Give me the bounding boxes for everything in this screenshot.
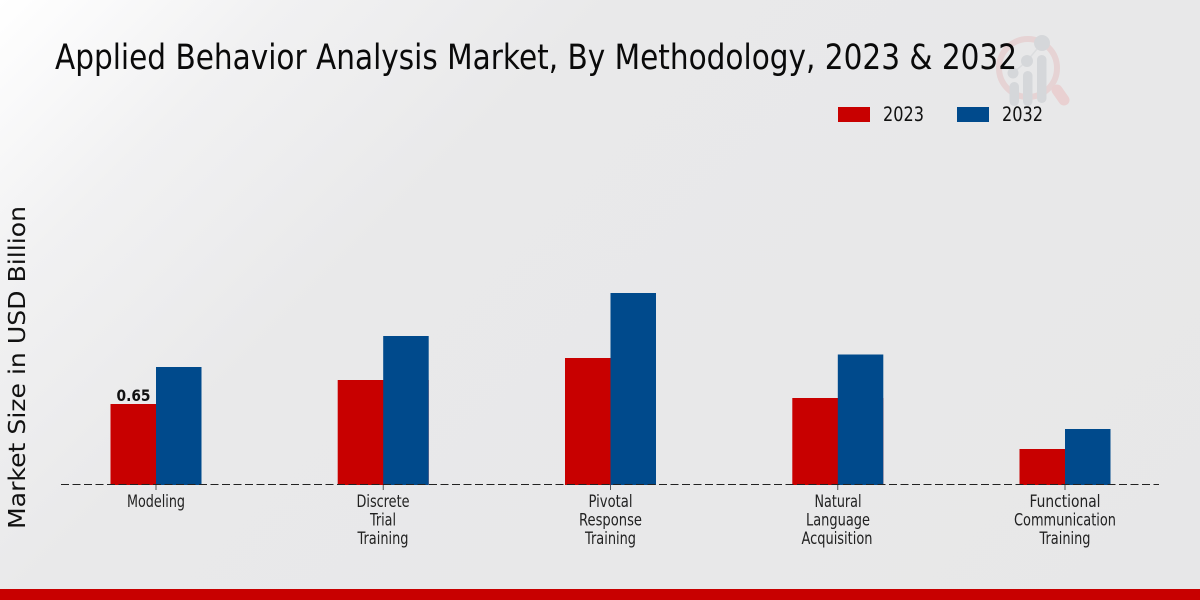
footer bar — [0, 589, 1200, 600]
label: Natural Language Acquisition — [802, 492, 872, 549]
group: Modeling — [110, 367, 202, 485]
title: Applied Behavior Analysis Market, By Methodology, 2023 & 2032 — [55, 38, 1017, 78]
icon: watermark logo — [999, 35, 1064, 106]
label: Functional Communication Training: Communication — [1014, 510, 1116, 530]
y axis label: Market Size in USD Billion — [5, 206, 31, 529]
label: Natural Language Acquisition: Language — [806, 510, 870, 530]
legend item: 2032: 2032 — [1002, 103, 1043, 126]
label: Modeling: Modeling — [127, 492, 185, 512]
legend item: 2023 — [838, 103, 924, 126]
x axis baseline — [61, 484, 1159, 486]
label: Natural Language Acquisition: Acquisition — [802, 529, 872, 549]
label: Pivotal Response Training: Response — [579, 510, 642, 530]
label: Discrete Trial Training: Training — [357, 529, 408, 549]
label: Pivotal Response Training: Training — [584, 529, 636, 549]
bar chart — [61, 293, 1159, 490]
legend — [838, 103, 1043, 126]
label: Discrete Trial Training: Trial — [369, 510, 396, 530]
label: Discrete Trial Training — [356, 492, 410, 549]
label: Pivotal Response Training: Pivotal — [588, 492, 632, 512]
legend item: 2032 — [957, 103, 1043, 126]
label: Pivotal Response Training — [579, 492, 642, 549]
value label: 0.65 — [116, 386, 150, 405]
group: Natural Language Acquisition — [792, 354, 883, 485]
group: Pivotal Response Training — [565, 293, 656, 485]
x axis labels — [127, 492, 1116, 549]
label: Functional Communication Training: Training — [1039, 529, 1090, 549]
group: Discrete Trial Training — [338, 336, 429, 485]
legend item: 2023: 2023 — [883, 103, 924, 126]
label: Discrete Trial Training: Discrete — [356, 492, 410, 512]
label: Natural Language Acquisition: Natural — [814, 492, 862, 512]
group: Functional Communication Training — [1020, 429, 1110, 485]
label: Functional Communication Training — [1014, 492, 1116, 549]
label: Functional Communication Training: Functional — [1030, 492, 1100, 512]
